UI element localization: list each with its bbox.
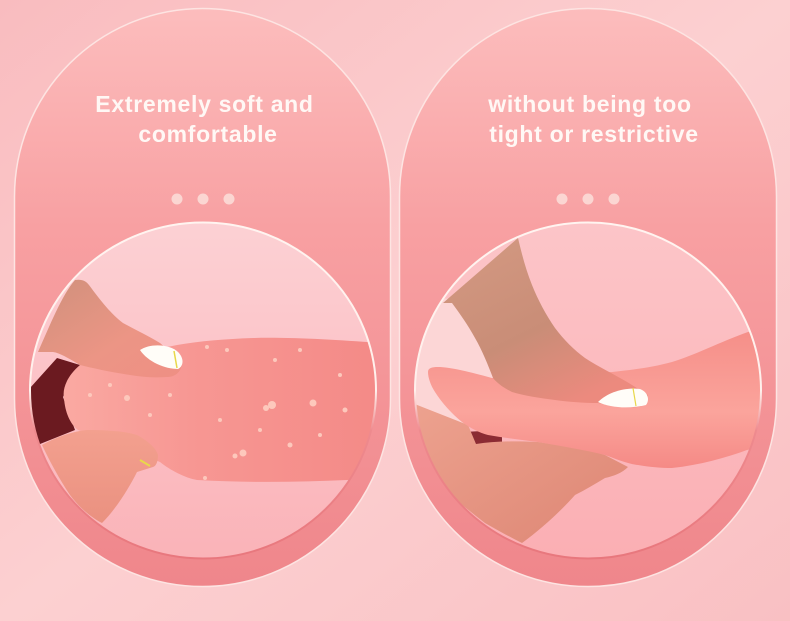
right heading <box>487 91 699 147</box>
left heading <box>95 91 314 147</box>
left heading: Extremely soft and <box>95 91 314 117</box>
right dots <box>556 194 620 204</box>
pressing thumb <box>443 238 648 407</box>
left capsule <box>14 8 390 586</box>
thumb nail <box>598 388 648 407</box>
dark gap <box>470 431 502 444</box>
lower finger <box>42 430 158 523</box>
panel: right <box>400 8 776 586</box>
panel: left <box>14 8 390 586</box>
dark background shape <box>30 358 80 444</box>
right photo circle <box>416 224 760 558</box>
soft pink object <box>64 338 380 482</box>
pale left backdrop <box>416 298 493 424</box>
water droplets <box>88 345 348 480</box>
right heading: tight or restrictive <box>489 121 699 147</box>
left dots <box>172 194 234 204</box>
right heading: without being too <box>487 91 692 117</box>
upper finger <box>38 280 182 377</box>
right capsule <box>400 8 776 586</box>
lower hand <box>412 403 628 543</box>
lower nail tip <box>140 460 150 466</box>
right circle outline <box>415 222 761 558</box>
upper nail <box>140 345 182 369</box>
left photo circle <box>31 224 375 558</box>
left heading: comfortable <box>138 121 278 147</box>
soft pink object <box>428 328 770 468</box>
left circle outline <box>30 222 376 558</box>
